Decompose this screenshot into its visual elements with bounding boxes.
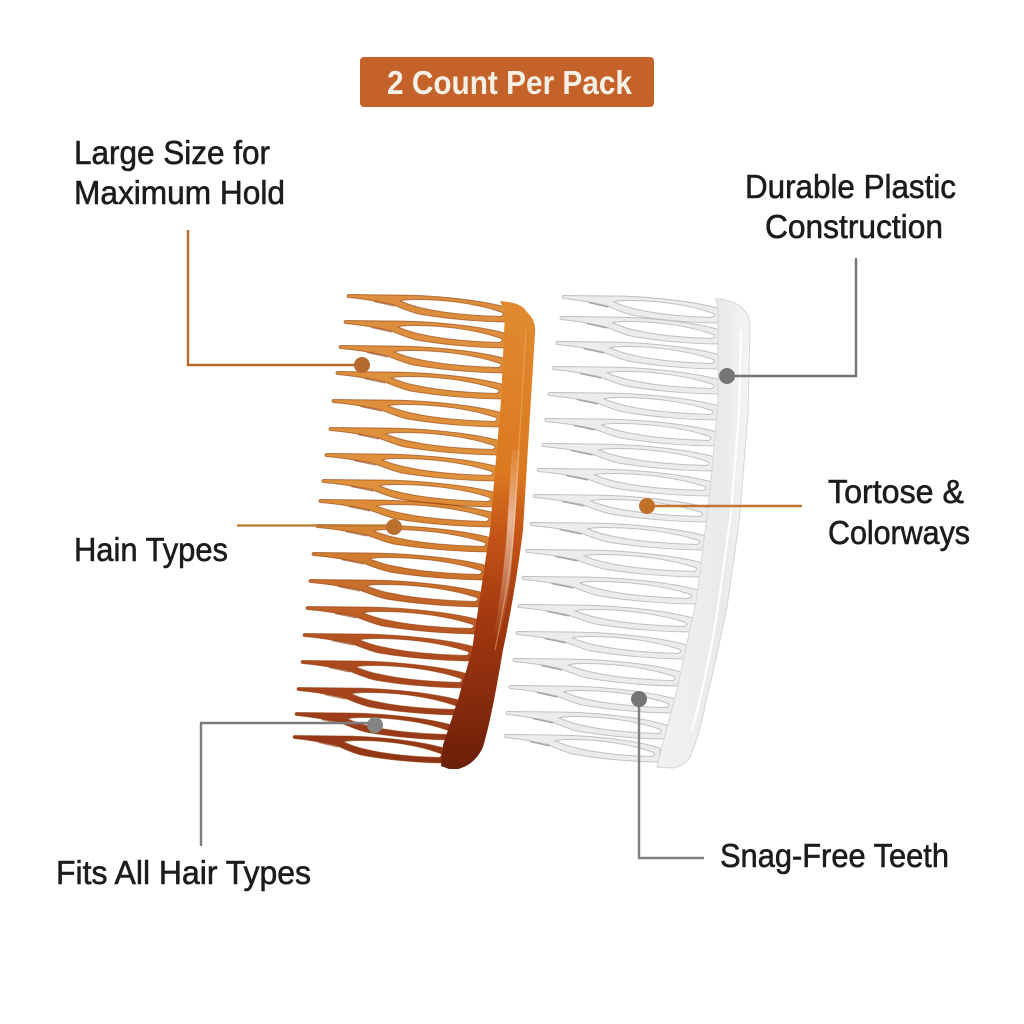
amber comb spine xyxy=(441,301,535,769)
callout: Snag-Free Teeth xyxy=(631,691,949,875)
callout: Tortose & Colorways xyxy=(639,474,970,552)
callout: Durable Plastic Construction: Construction xyxy=(765,209,943,246)
callout: Hain Types xyxy=(74,519,402,569)
callout: Fits All Hair Types xyxy=(56,717,383,892)
clear spine highlight xyxy=(692,330,741,730)
callout: Durable Plastic Construction xyxy=(719,169,956,384)
callout: Fits All Hair Types: Fits All Hair Types xyxy=(56,855,311,892)
amber tortoise comb xyxy=(285,285,535,775)
badge: 2 Count Per Pack xyxy=(360,57,654,107)
callout: Tortose & Colorways: Tortose & xyxy=(828,474,964,511)
amber comb teeth xyxy=(292,294,505,764)
callout: Durable Plastic Construction: Durable Plastic xyxy=(745,169,956,206)
callout: Large Size for Maximum Hold: Large Size for xyxy=(74,135,270,172)
clear comb xyxy=(504,296,750,768)
callout: Tortose & Colorways: Colorways xyxy=(828,515,970,552)
amber spine inner edge and highlight xyxy=(494,330,526,650)
clear comb teeth xyxy=(504,296,720,762)
clear comb spine xyxy=(657,299,750,768)
badge: 2 Count Per Pack: 2 Count Per Pack xyxy=(387,65,632,102)
callout: Large Size for Maximum Hold: Maximum Hold xyxy=(74,175,285,212)
callout: Hain Types: Hain Types xyxy=(74,532,228,569)
callout: Snag-Free Teeth: Snag-Free Teeth xyxy=(720,838,949,875)
callout: Large Size for Maximum Hold xyxy=(74,135,370,373)
